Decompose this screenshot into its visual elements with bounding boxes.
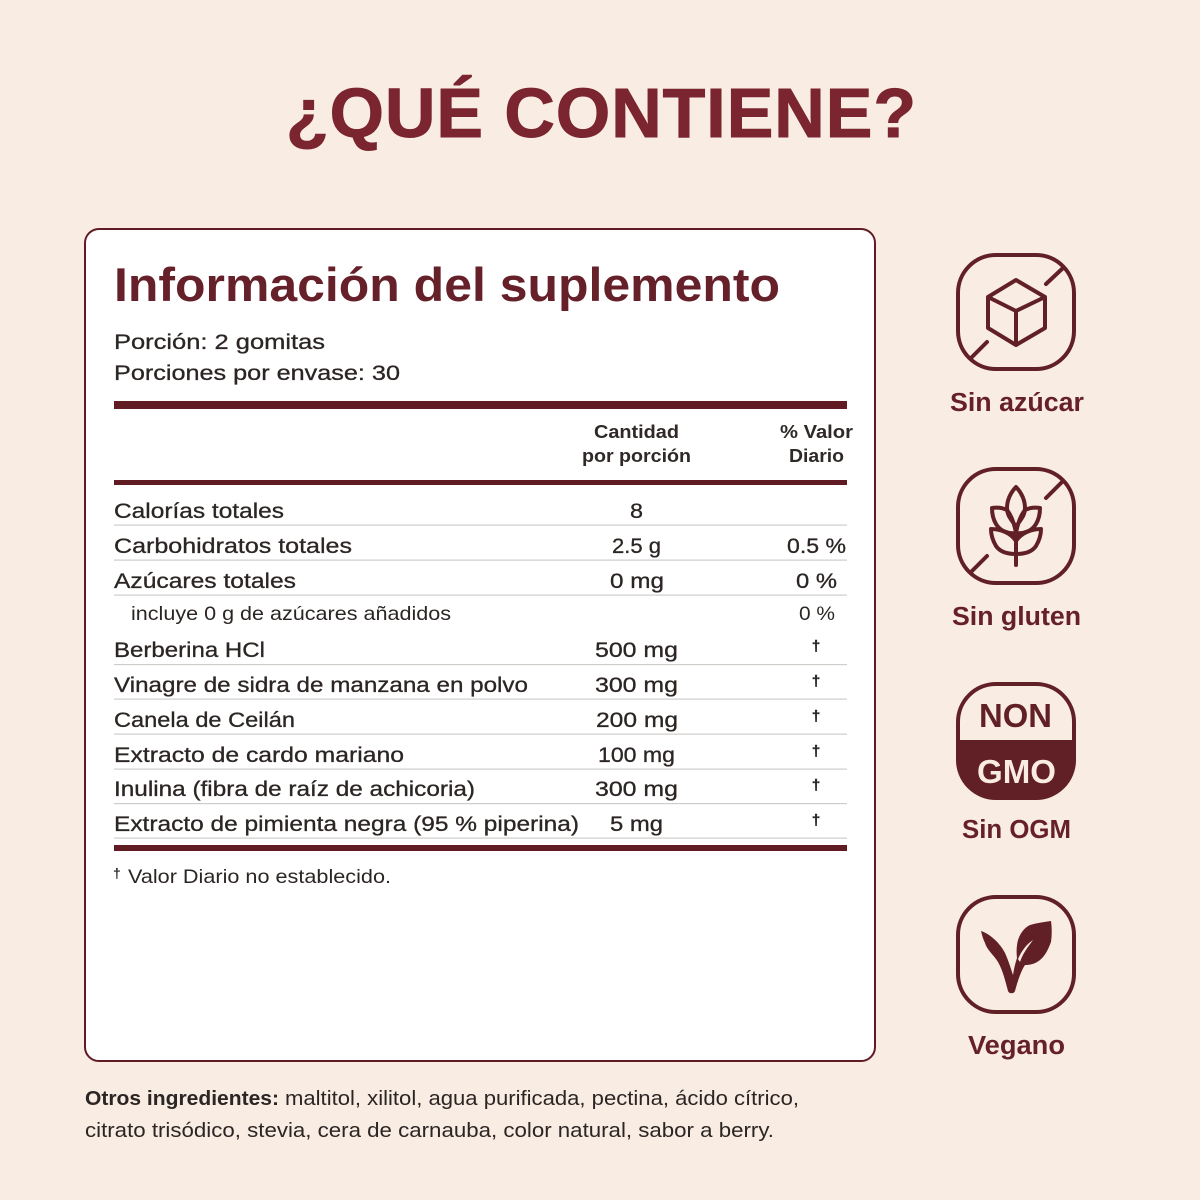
footnote: † (113, 865, 121, 881)
column header: daily value (780, 422, 853, 466)
label: sugar free: Sin azúcar (950, 389, 1084, 417)
row: total sugars (114, 569, 837, 593)
row: milk thistle: 100 mg (598, 743, 675, 767)
icon: vegan leaf (958, 897, 1074, 1012)
row: inulin: † (812, 777, 820, 794)
label: vegan: Vegano (968, 1032, 1065, 1060)
label: no GMO: Sin OGM (962, 816, 1071, 844)
other ingredients: citrato trisódico, stevia, cera de carnauba, color natural, sabor a berry. (85, 1119, 774, 1142)
badge: non GMO (958, 684, 1074, 844)
icon: non GMO: NON (979, 697, 1052, 734)
row: calories: Calorías totales (114, 499, 284, 523)
row: calories: 8 (630, 499, 643, 523)
row: total sugars: 0 mg (610, 569, 664, 593)
row: inulin: 300 mg (595, 777, 678, 801)
row: ceylon cinnamon: † (812, 708, 820, 725)
other ingredients (85, 1087, 799, 1142)
serving information: Porción: 2 gomitas (114, 330, 325, 354)
row: berberine: 500 mg (595, 638, 678, 662)
label: gluten free: Sin gluten (952, 603, 1081, 631)
row: black pepper extract: Extracto de pimienta negra (95 % piperina) (114, 812, 579, 836)
column header: daily value: % Valor (780, 422, 853, 442)
row: ceylon cinnamon: 200 mg (596, 708, 678, 732)
serving information: Porciones por envase: 30 (114, 361, 400, 385)
row: apple cider vinegar (114, 673, 820, 697)
icon: crossed wheat (958, 469, 1074, 583)
row: inulin: Inulina (fibra de raíz de achicoria) (114, 777, 475, 801)
row: calories (114, 499, 643, 523)
row: total sugars: 0 % (796, 569, 837, 593)
other ingredients: maltitol, xilitol, agua purificada, pectina, ácido cítrico, (285, 1087, 799, 1110)
badge: gluten free (952, 469, 1081, 631)
row: black pepper extract (114, 812, 820, 836)
row: added sugars (131, 603, 835, 625)
row: added sugars: 0 % (799, 603, 835, 625)
column header: daily value: Diario (789, 446, 844, 466)
row: apple cider vinegar: 300 mg (595, 673, 678, 697)
footnote: Valor Diario no establecido. (128, 866, 391, 888)
row: apple cider vinegar: † (812, 673, 820, 690)
row: berberine: Berberina HCl (114, 638, 265, 662)
row: ceylon cinnamon (114, 708, 820, 732)
other ingredients: Otros ingredientes: (85, 1088, 279, 1110)
column header: amount per serving: Cantidad (594, 422, 679, 442)
panel: supplement facts (85, 229, 875, 1061)
row: carbohydrates: Carbohidratos totales (114, 534, 352, 558)
badge: sugar free (950, 255, 1084, 417)
icon: non GMO (958, 684, 1074, 798)
row: berberine: † (812, 638, 820, 655)
row: black pepper extract: † (812, 812, 820, 829)
column header: amount per serving (582, 422, 691, 466)
row: black pepper extract: 5 mg (610, 812, 663, 836)
row: carbohydrates (114, 534, 846, 558)
icon: non GMO: GMO (977, 753, 1056, 790)
row: berberine (114, 638, 820, 662)
row: milk thistle (114, 743, 820, 767)
column header: amount per serving: por porción (582, 446, 691, 466)
row: carbohydrates: 0.5 % (787, 534, 846, 558)
row: added sugars: incluye 0 g de azúcares añadidos (131, 603, 451, 625)
row: inulin (114, 777, 820, 801)
serving information (114, 330, 400, 385)
row: ceylon cinnamon: Canela de Ceilán (114, 708, 295, 732)
icon: crossed sugar cube (958, 255, 1074, 369)
row: carbohydrates: 2.5 g (612, 534, 661, 558)
title: ¿QUÉ CONTIENE? (286, 74, 917, 152)
badge: vegan (958, 897, 1074, 1060)
row: apple cider vinegar: Vinagre de sidra de manzana en polvo (114, 673, 528, 697)
row: milk thistle: † (812, 743, 820, 760)
row: milk thistle: Extracto de cardo mariano (114, 743, 404, 767)
row: total sugars: Azúcares totales (114, 569, 296, 593)
panel heading: Información del suplemento (114, 258, 780, 311)
